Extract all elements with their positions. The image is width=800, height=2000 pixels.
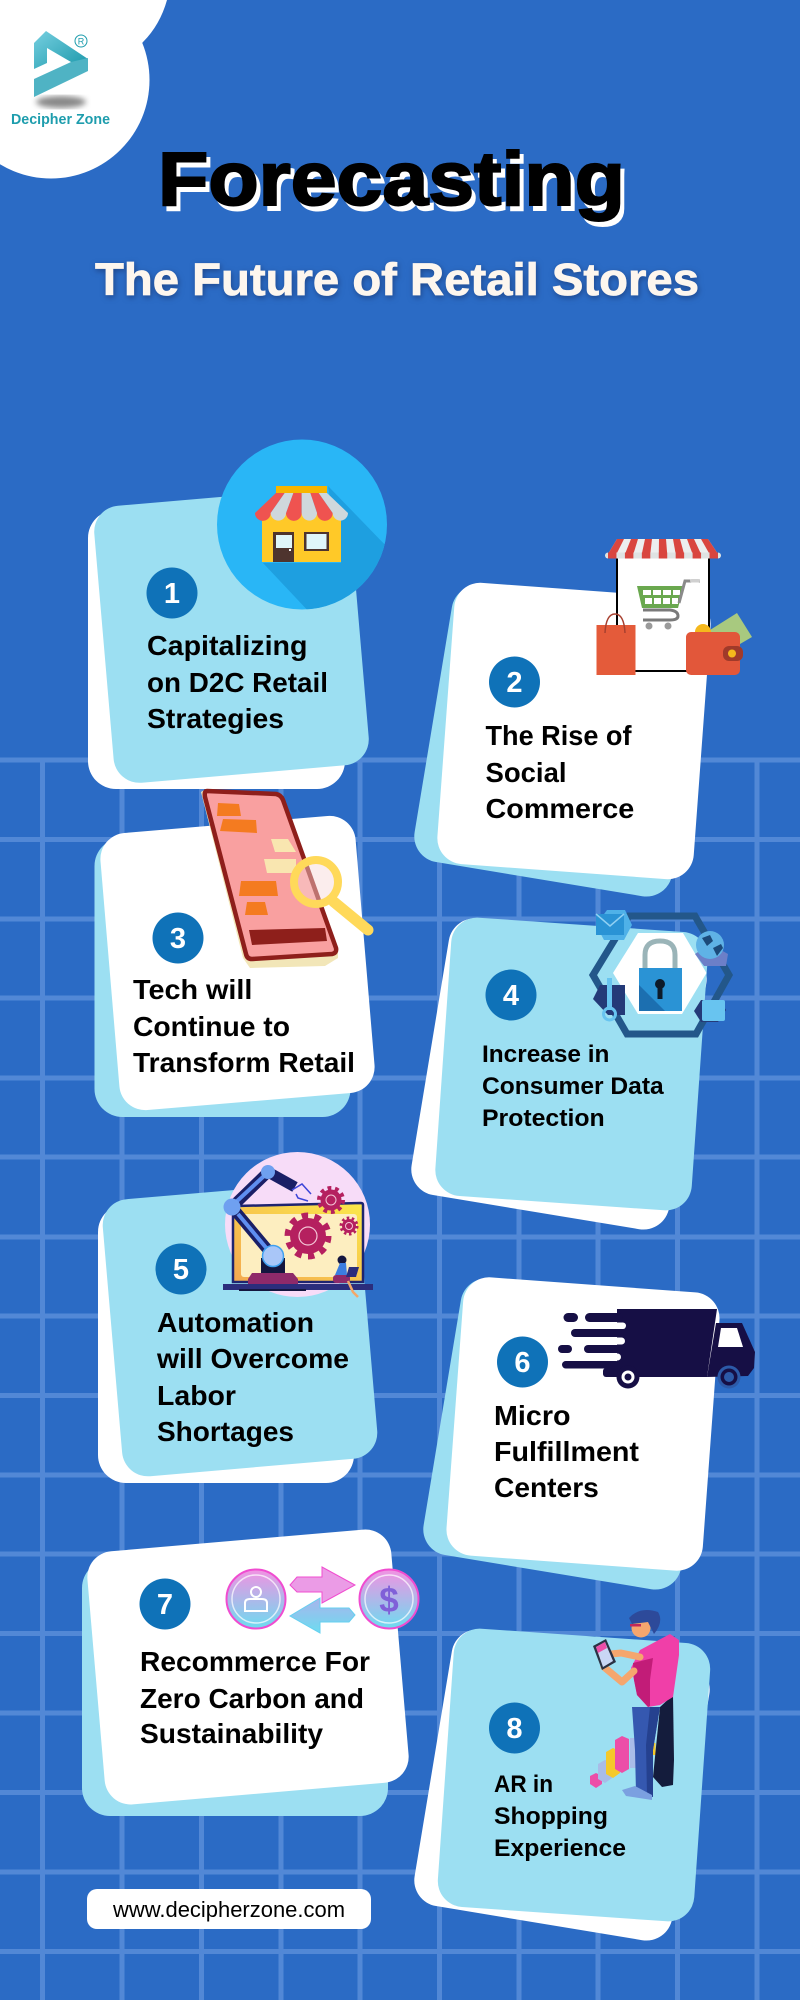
wallet	[686, 632, 740, 675]
card 5 label: Shortages	[157, 1416, 294, 1447]
logo badge	[0, 0, 167, 178]
card 5 label: will Overcome	[156, 1343, 349, 1374]
card 7 label: Recommerce For	[140, 1646, 370, 1677]
website pill	[87, 1889, 371, 1929]
card 2 label	[486, 720, 634, 824]
number badge 7: 7	[157, 1589, 173, 1621]
bar chart	[590, 1736, 656, 1788]
card 3 label: Tech will	[133, 974, 252, 1005]
card 8 label: AR in	[494, 1771, 553, 1798]
number badge 8	[489, 1702, 540, 1754]
number badge 1	[146, 568, 198, 618]
card 5 label: Labor	[157, 1380, 236, 1411]
panel: card 3	[94, 789, 377, 1117]
icon: data lock	[593, 910, 729, 1034]
registered mark: R	[78, 36, 85, 46]
panel: card 1	[88, 440, 392, 789]
card 8 label: Experience	[494, 1835, 626, 1862]
card 6 label: Centers	[494, 1472, 599, 1503]
number badge 2	[489, 656, 540, 708]
icon: folder	[694, 1000, 726, 1022]
card 3 label: Transform Retail	[133, 1047, 355, 1078]
number badge 3	[152, 912, 204, 964]
card 1 label: on D2C Retail	[147, 667, 328, 698]
number badge 1: 1	[164, 578, 180, 610]
card 8 label	[494, 1771, 626, 1862]
card 1 label	[147, 630, 328, 734]
card 6 label	[494, 1400, 639, 1503]
number badge 2: 2	[506, 667, 523, 699]
magnifier	[294, 860, 368, 930]
website pill: www.decipherzone.com	[112, 1897, 345, 1922]
shopping bag	[596, 614, 636, 675]
card 3 label	[133, 974, 355, 1078]
cart	[637, 579, 700, 630]
panel: card 4	[407, 910, 729, 1233]
card 4 label: Consumer Data	[482, 1073, 664, 1100]
icon: man with phone and AR chart	[590, 1610, 679, 1800]
card 2 label: The Rise of	[486, 720, 632, 751]
icon: store	[217, 440, 392, 615]
card 5 label: Automation	[157, 1307, 314, 1338]
number badge 7	[140, 1578, 190, 1630]
icon: recommerce exchange	[226, 1567, 418, 1633]
card 3 label: Continue to	[133, 1011, 290, 1042]
icon: robot arm automation	[223, 1152, 373, 1297]
robot arm	[224, 1165, 311, 1288]
icon: phone and magnifier	[201, 789, 368, 968]
number badge 4	[486, 970, 536, 1020]
card 2 label: Commerce	[486, 793, 634, 824]
number badge 3: 3	[170, 923, 186, 955]
number badge 8: 8	[506, 1713, 523, 1745]
card 7 label: Sustainability	[140, 1718, 324, 1749]
title: Forecasting	[158, 137, 625, 222]
card 1 label: Strategies	[147, 703, 284, 734]
money	[710, 613, 752, 648]
card 6 label: Micro	[494, 1400, 570, 1431]
number badge 5: 5	[173, 1254, 189, 1286]
person with laptop	[333, 1256, 359, 1297]
registered mark	[75, 35, 87, 47]
icon: online shop	[596, 539, 752, 675]
icon: logo mark	[34, 31, 88, 108]
panel: card 8	[410, 1610, 714, 1944]
card 5 label	[156, 1307, 349, 1447]
logo wordmark: Decipher Zone	[11, 112, 110, 128]
icon: key	[593, 978, 625, 1020]
icon: envelope	[596, 910, 632, 940]
gears	[288, 1188, 357, 1256]
icon: globe	[695, 931, 728, 966]
panel: card 6	[419, 1275, 755, 1593]
card 8 label: Shopping	[494, 1803, 608, 1830]
icon: delivery truck	[558, 1309, 755, 1388]
panel: card 5	[98, 1152, 379, 1483]
card 7 label	[140, 1646, 370, 1749]
number badge 6	[497, 1336, 548, 1388]
subtitle: The Future of Retail Stores	[95, 254, 699, 305]
card 4 label	[482, 1041, 664, 1132]
card 4 label: Increase in	[482, 1041, 609, 1068]
panel: card 2	[410, 539, 752, 900]
card 6 label: Fulfillment	[494, 1436, 639, 1467]
card 2 label: Social	[486, 757, 566, 788]
card 1 label: Capitalizing	[147, 630, 308, 661]
panel: card 7	[82, 1527, 418, 1816]
card 4 label: Protection	[482, 1105, 605, 1132]
icon: recommerce exchange: $	[379, 1581, 399, 1620]
number badge 5	[156, 1244, 206, 1294]
number badge 6: 6	[514, 1347, 531, 1379]
card 7 label: Zero Carbon and	[140, 1683, 364, 1714]
number badge 4: 4	[503, 980, 519, 1012]
